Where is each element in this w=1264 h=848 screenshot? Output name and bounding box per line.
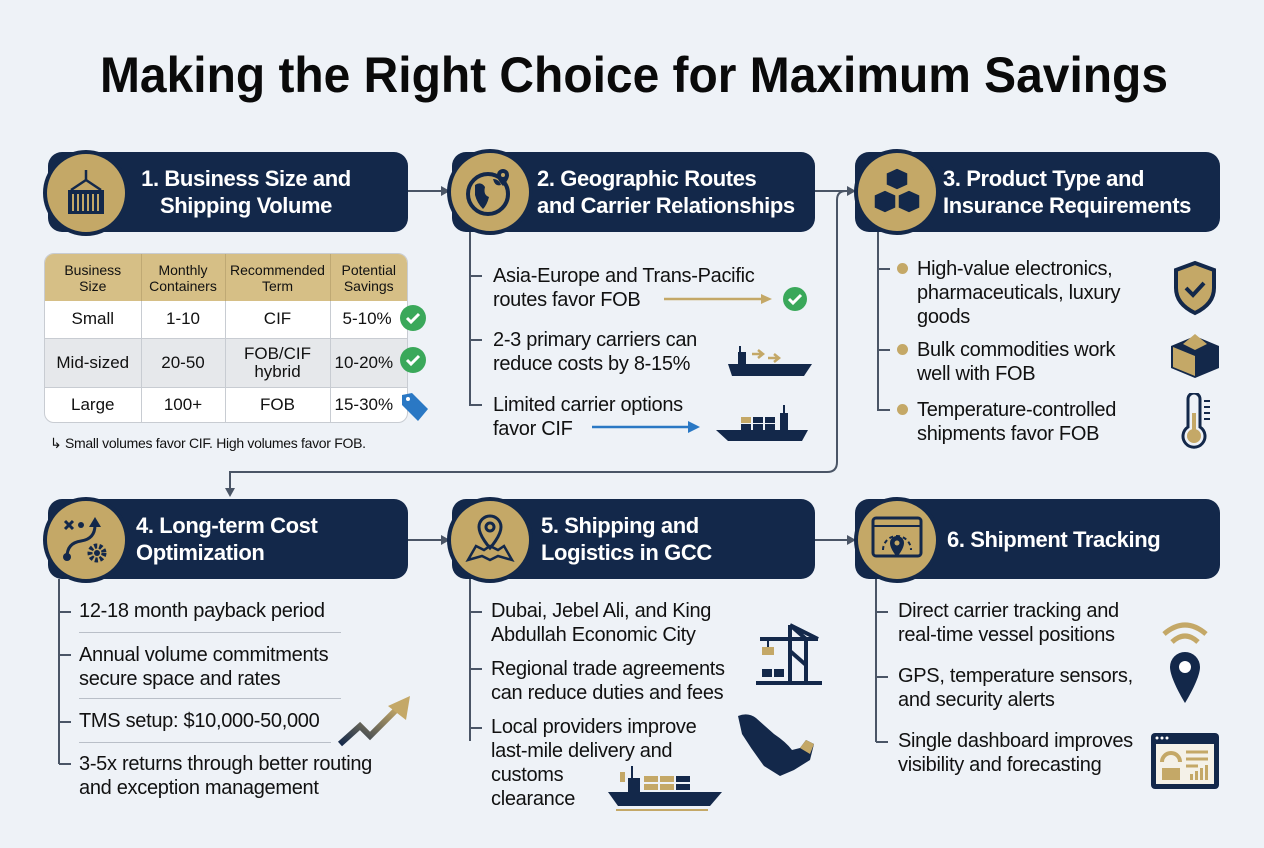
table: business size: Small xyxy=(71,309,114,328)
table: business size: Potential xyxy=(342,262,396,278)
header 5: 5. Shipping and xyxy=(541,513,699,538)
table: business size: 15-30% xyxy=(334,395,393,414)
text: routes: routes favor FOB xyxy=(493,289,640,311)
icons: checks and tag xyxy=(400,305,428,421)
arrow blue + ship xyxy=(592,405,808,441)
table: business size: Size xyxy=(79,278,106,294)
text: carriers: reduce costs by 8-15% xyxy=(493,353,690,375)
icon: GCC map xyxy=(738,714,814,776)
text: local: clearance xyxy=(491,788,575,810)
header 2: 2. Geographic Routes xyxy=(537,166,756,191)
text: high value xyxy=(917,258,1120,328)
table: business size: 10-20% xyxy=(334,352,393,372)
table: business size: FOB/CIF xyxy=(244,344,311,362)
table: business size: Monthly xyxy=(158,262,208,278)
text: TMS: TMS setup: $10,000-50,000 xyxy=(79,710,319,732)
header 4: 4. Long-term Cost xyxy=(136,513,317,538)
table: business size: 100+ xyxy=(164,395,202,414)
text: payback: 12-18 month payback period xyxy=(79,600,325,622)
text: annual: secure space and rates xyxy=(79,668,280,690)
header 1 xyxy=(48,152,408,232)
text: local: last-mile delivery and xyxy=(491,740,672,762)
table: business size: 20-50 xyxy=(161,352,205,372)
text: returns: 3-5x returns through better routing xyxy=(79,753,372,775)
text: routes xyxy=(493,265,754,311)
table: business size: hybrid xyxy=(254,362,301,380)
icon: dashboard xyxy=(1151,733,1219,789)
icon: globe xyxy=(447,149,533,235)
table: business size: CIF xyxy=(264,309,291,328)
panel 4 tree xyxy=(58,579,60,764)
text: regional: can reduce duties and fees xyxy=(491,682,723,704)
table: business size: Large xyxy=(71,395,114,414)
note: ↳ Small volumes favor CIF. High volumes favor FOB. xyxy=(50,435,366,451)
text: local xyxy=(491,716,696,810)
text: GPS xyxy=(898,665,1133,711)
text: GPS: GPS, temperature sensors, xyxy=(898,665,1133,687)
text: carriers xyxy=(493,329,697,375)
text: GPS: and security alerts xyxy=(898,689,1055,711)
panel 3 tree xyxy=(877,232,879,411)
text: ports xyxy=(491,600,711,646)
table: business size: Term xyxy=(262,278,293,294)
text: annual xyxy=(79,644,328,690)
header 3: 3. Product Type and xyxy=(943,166,1144,191)
text: carriers: 2-3 primary carriers can xyxy=(493,329,697,351)
icon: optimization xyxy=(43,497,129,583)
text: bulk xyxy=(917,339,1116,385)
text: temperature xyxy=(917,399,1116,445)
header 6 xyxy=(855,499,1220,579)
icon: map pin xyxy=(447,497,533,583)
header 1: 1. Business Size and xyxy=(141,166,351,191)
table: business size: FOB xyxy=(260,395,295,414)
text: temperature: shipments favor FOB xyxy=(917,423,1099,445)
text: ports: Abdullah Economic City xyxy=(491,624,696,646)
table: business size: Containers xyxy=(149,278,217,294)
table: business size: 1-10 xyxy=(166,309,200,328)
icon: box xyxy=(1171,334,1219,378)
icon: ship small xyxy=(728,346,812,376)
header 5 xyxy=(452,499,815,579)
text: direct: real-time vessel positions xyxy=(898,624,1115,646)
icon: trend arrow xyxy=(338,696,410,746)
icon: signal pin xyxy=(1162,622,1208,703)
text: routes: Asia-Europe and Trans-Pacific xyxy=(493,265,754,287)
text: dashboard: visibility and forecasting xyxy=(898,754,1101,776)
text: local: customs xyxy=(491,764,563,786)
table: business size: Mid-sized xyxy=(56,352,129,372)
table: business size: Business xyxy=(64,262,121,278)
header 3 xyxy=(855,152,1220,232)
arrow gold + check xyxy=(664,287,807,311)
panel 5 tree xyxy=(469,579,471,741)
text: bulk: Bulk commodities work xyxy=(917,339,1115,361)
panel 2 tree xyxy=(469,232,471,406)
text: ports: Dubai, Jebel Ali, and King xyxy=(491,600,711,622)
text: regional: Regional trade agreements xyxy=(491,658,725,680)
text: returns: and exception management xyxy=(79,777,319,799)
icon: boxes xyxy=(854,149,940,235)
text: temperature: Temperature-controlled xyxy=(917,399,1116,421)
text: bulk: well with FOB xyxy=(917,363,1035,385)
icon: container xyxy=(43,150,129,236)
panel 6 tree xyxy=(875,579,877,742)
table: business size xyxy=(44,253,408,423)
icon: thermometer xyxy=(1182,393,1210,449)
icon: cargo ship xyxy=(608,766,722,811)
table: business size: Recommended xyxy=(230,262,325,278)
text: dashboard: Single dashboard improves xyxy=(898,730,1133,752)
text: limited: Limited carrier options xyxy=(493,394,683,416)
text: high value: High-value electronics, xyxy=(917,258,1112,280)
text: high value: goods xyxy=(917,306,970,328)
text: high value: pharmaceuticals, luxury xyxy=(917,282,1120,304)
table: business size: 5-10% xyxy=(342,309,392,328)
text: returns xyxy=(79,753,372,799)
header 1: Shipping Volume xyxy=(160,193,332,218)
text: local: Local providers improve xyxy=(491,716,696,738)
text: direct: Direct carrier tracking and xyxy=(898,600,1119,622)
icon: tracking screen xyxy=(854,497,940,583)
title: Making the Right Choice for Maximum Savings xyxy=(100,47,1168,103)
text: limited xyxy=(493,394,683,440)
header 2 xyxy=(452,152,815,232)
text: limited: favor CIF xyxy=(493,418,573,440)
text: dashboard xyxy=(898,730,1133,776)
icon: shield xyxy=(1174,260,1216,316)
header 2: and Carrier Relationships xyxy=(537,193,795,218)
header 6: 6. Shipment Tracking xyxy=(947,526,1160,552)
header 3: Insurance Requirements xyxy=(943,193,1191,218)
icon: port crane xyxy=(756,623,822,685)
text: annual: Annual volume commitments xyxy=(79,644,328,666)
table: business size: Savings xyxy=(344,278,394,294)
text: regional xyxy=(491,658,725,704)
header 4: Optimization xyxy=(136,540,264,565)
text: direct xyxy=(898,600,1119,646)
header 4 xyxy=(48,499,408,579)
header 5: Logistics in GCC xyxy=(541,540,712,565)
